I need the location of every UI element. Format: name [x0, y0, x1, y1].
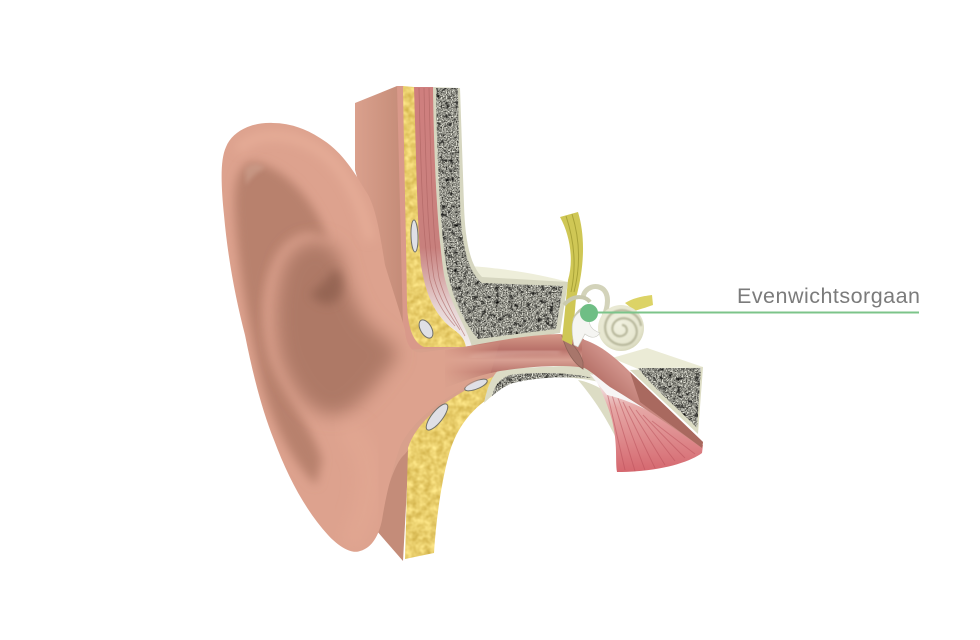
vessel upper — [410, 220, 419, 252]
skin cut band — [397, 86, 500, 356]
callout line — [589, 312, 919, 314]
canal cut edge — [630, 372, 703, 448]
muscle fan — [590, 372, 703, 472]
inner ear — [564, 287, 644, 351]
eardrum — [562, 336, 583, 369]
vessel lower — [416, 318, 436, 340]
helix rim highlight — [238, 136, 370, 240]
tragus shadow — [310, 268, 343, 304]
lower wall fold behind lobe — [376, 445, 409, 561]
lower bone arc — [484, 365, 610, 403]
spongy bone — [436, 88, 563, 339]
small nerve branch — [625, 295, 653, 311]
lobe highlight — [345, 430, 369, 545]
fan fibres — [607, 392, 695, 471]
upper wall section — [397, 86, 568, 356]
fat layer — [403, 86, 466, 347]
ear anatomy infographic — [222, 86, 919, 561]
canal main tube — [445, 334, 584, 388]
right bone block — [638, 368, 701, 428]
scapha shading — [235, 162, 328, 485]
muscle layer — [413, 87, 472, 347]
muscle fibres — [419, 88, 465, 336]
white tendon — [590, 374, 655, 415]
bone shelf top — [470, 266, 568, 296]
lower vessel large — [423, 401, 451, 433]
block side — [630, 367, 703, 434]
callout label: Evenwichtsorgaan — [737, 284, 920, 308]
back wall skin — [355, 86, 408, 343]
bone layer border — [432, 87, 568, 347]
nerve — [560, 212, 583, 345]
ear base — [222, 123, 500, 552]
wedge under canal — [578, 380, 622, 442]
skin behind canal opening — [380, 345, 504, 522]
upper crease highlight — [245, 165, 262, 182]
canal highlight — [470, 351, 560, 357]
outer ear — [222, 123, 500, 552]
beige bone mass right — [578, 348, 703, 442]
ossicles — [572, 311, 600, 347]
cochlea — [598, 305, 644, 351]
semicircular canals — [583, 287, 608, 322]
lower fat layer — [405, 373, 502, 559]
block top face — [612, 348, 703, 369]
lower vessel small — [463, 377, 489, 393]
ear canal — [445, 334, 703, 448]
canal distal tube — [582, 339, 703, 448]
concha shading — [276, 241, 398, 415]
callout dot — [580, 304, 598, 322]
